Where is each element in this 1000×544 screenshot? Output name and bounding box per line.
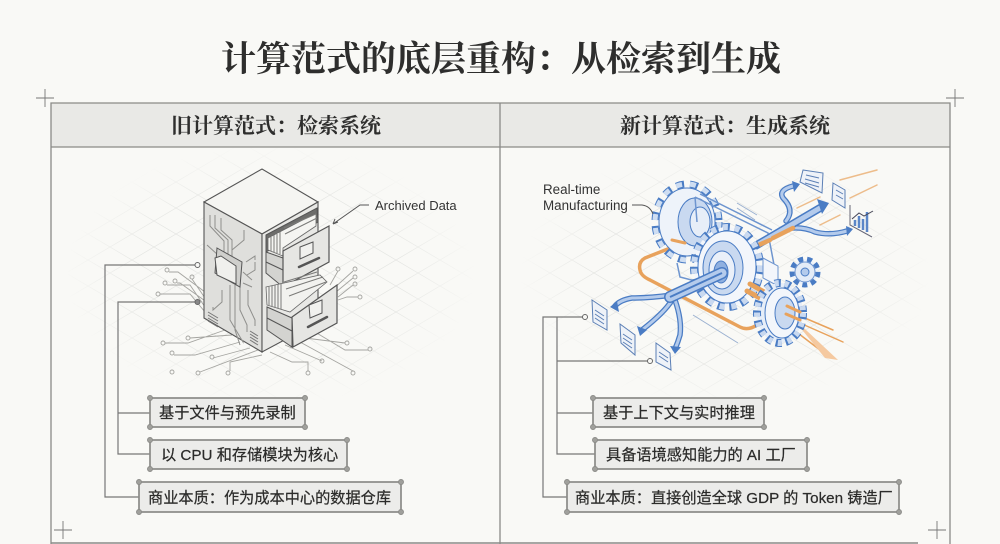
callout: token foundry: 商业本质：直接创造全球 GDP 的 Token 铸造厂 [575, 489, 893, 507]
label: Archived Data: Archived Data [375, 198, 457, 213]
gear: small [792, 259, 818, 285]
bottom drawer [266, 272, 337, 347]
orange drive link [747, 284, 766, 298]
floor circuit traces [156, 267, 372, 375]
callout: CPU and storage [148, 438, 350, 472]
document icons: inputs [592, 300, 671, 370]
vents [208, 312, 258, 345]
connector lines: old paradigm [105, 262, 200, 497]
icon: folder [215, 248, 242, 287]
gear: back [655, 184, 719, 260]
callout: cost center [136, 480, 404, 514]
gear: main [694, 227, 760, 307]
label: Real-time Manufacturing: Manufacturing [543, 198, 628, 213]
top drawer [266, 208, 329, 287]
comparison table frame [51, 103, 950, 544]
chart icon [850, 205, 873, 237]
illustration: gears and data flow [592, 170, 877, 370]
orange loop [640, 243, 757, 329]
label: Archived Data [333, 198, 457, 224]
label: Real-time Manufacturing: Real-time [543, 182, 600, 197]
callout: AI factory [592, 438, 810, 472]
callout: CPU and storage: 以 CPU 和存储模块为核心 [161, 447, 338, 464]
callout: file-based: 基于文件与预先录制 [159, 405, 296, 422]
connector lines: new paradigm [543, 314, 652, 497]
callout: context inference [590, 396, 766, 430]
cabinet circuit traces [207, 215, 255, 345]
heading: new paradigm: 新计算范式：生成系统 [620, 114, 831, 138]
cabinet body [204, 169, 318, 234]
guide lines [693, 203, 757, 343]
panel: old paradigm [105, 114, 457, 514]
callout: file-based [148, 396, 308, 430]
input pipes [610, 273, 722, 354]
callout: cost center: 商业本质：作为成本中心的数据仓库 [148, 490, 391, 507]
document icons: outputs [800, 170, 845, 208]
gear: front [757, 283, 803, 343]
frame bracket [677, 194, 775, 283]
callout: context inference: 基于上下文与实时推理 [603, 405, 755, 422]
corner registration marks [36, 89, 964, 539]
title: 计算范式的底层重构：从检索到生成 [221, 40, 781, 79]
callout: AI factory: 具备语境感知能力的 AI 工厂 [606, 446, 796, 464]
panel: new paradigm [543, 114, 902, 514]
callout: token foundry [564, 480, 902, 514]
label: Real-time Manufacturing [543, 182, 653, 214]
lock housing [763, 258, 778, 286]
icon: filing cabinet with circuit traces [156, 169, 372, 375]
heading: old paradigm: 旧计算范式：检索系统 [171, 114, 382, 138]
orange streaks [790, 170, 877, 360]
output pipes [745, 181, 853, 252]
